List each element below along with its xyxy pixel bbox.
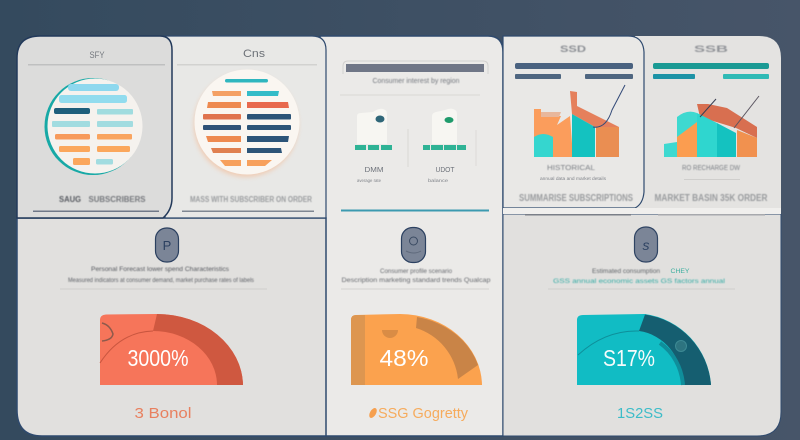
- chart caption: HISTORICAL: [547, 165, 595, 172]
- icon: pill: P: [163, 238, 171, 253]
- footer text: MARKET BASIN 35K ORDER: [654, 193, 768, 204]
- text line 2: Measured indicators at consumer demand, market purchase rates of labels: [68, 277, 255, 284]
- text line 1: Estimated consumption: [592, 269, 660, 275]
- panel: right top second card: [635, 36, 781, 208]
- icon: pill: [156, 228, 178, 262]
- text line 1: Consumer profile scenario: [380, 269, 453, 275]
- card footer label: SAUG: [59, 195, 81, 204]
- header bars: [515, 63, 633, 79]
- teal text line 2: GSS annual economic assets GS factors annual: [553, 278, 726, 285]
- panel: middle column: [320, 36, 503, 436]
- panel: top first card: [17, 36, 172, 218]
- label left: DMM: [364, 167, 384, 174]
- gauge: orange: 48%: [380, 345, 428, 371]
- panel: right top first card: [503, 36, 644, 208]
- caption left: average rate: [357, 178, 381, 183]
- icon: pill: s: [642, 237, 650, 253]
- gauge: coral: 3000%: [128, 345, 188, 371]
- card heading: SSD: [560, 44, 587, 54]
- striped circle chart: [44, 78, 142, 175]
- panel: bottom left: [17, 218, 326, 436]
- area chart: [664, 96, 759, 157]
- gauge: teal: S17%: [603, 345, 655, 371]
- header bars: [653, 63, 769, 79]
- panel: middle bottom content: [341, 228, 491, 422]
- card heading: SFY: [90, 50, 104, 60]
- striped circle chart: [194, 70, 300, 174]
- text line 2: Description marketing standard trends Qualcap: [342, 278, 491, 284]
- text accent: CHEY: [670, 268, 690, 275]
- icon: document right: [423, 109, 466, 150]
- chart caption: RO RECHARGE DW: [682, 165, 740, 172]
- icon: pill: [402, 228, 426, 262]
- gauge label: orange: SSG Gogretty: [378, 405, 468, 422]
- middle header bar: [343, 61, 488, 74]
- gauge: orange: [351, 314, 482, 385]
- middle subtitle: Consumer interest by region: [372, 78, 460, 85]
- card footer text: SUBSCRIBERS: [88, 195, 146, 204]
- panel: bottom right: [503, 214, 781, 436]
- card heading: Cns: [243, 48, 266, 60]
- panel: top second card: [165, 36, 326, 218]
- label right: UDOT: [436, 167, 455, 174]
- gauge: teal: [577, 314, 711, 385]
- gauge label: teal: 1S2SS: [617, 405, 663, 422]
- card heading: SSB: [694, 44, 729, 54]
- text line 1: Personal Forecast lower spend Characteristics: [91, 267, 229, 273]
- donut shadow: [194, 73, 298, 177]
- gauge: coral: [100, 314, 243, 385]
- caption right: balance: [428, 178, 449, 183]
- chart sub caption: annual data and market details: [540, 176, 607, 181]
- gauge label: coral: 3 Bonol: [134, 405, 192, 422]
- area chart: [534, 85, 625, 157]
- icon: document left: [355, 109, 392, 150]
- card footer text: MASS WITH SUBSCRIBER ON ORDER: [190, 195, 312, 204]
- icon: pill: [634, 227, 658, 262]
- footer text: SUMMARISE SUBSCRIPTIONS: [519, 193, 633, 204]
